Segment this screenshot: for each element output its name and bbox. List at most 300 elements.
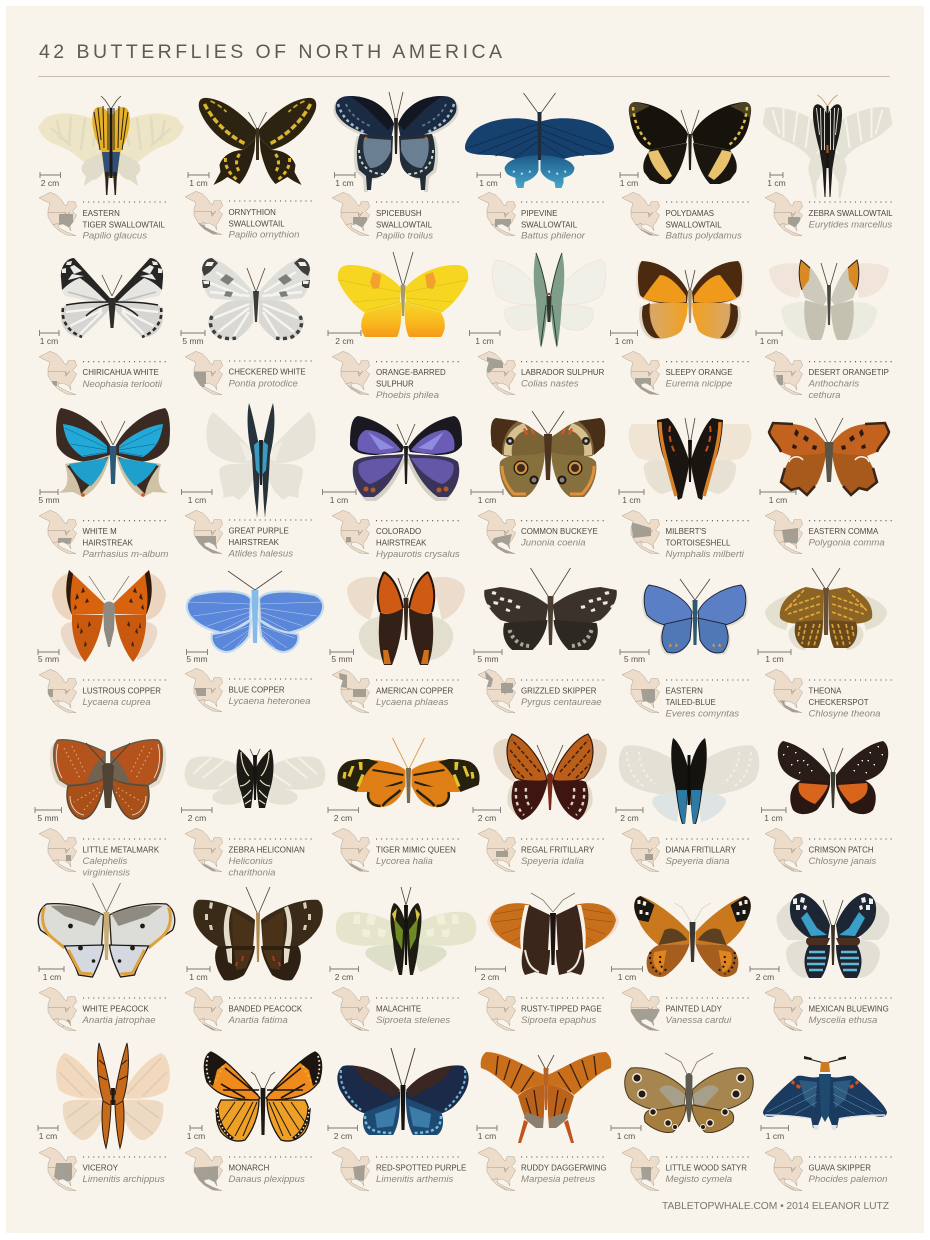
range map — [332, 828, 370, 874]
species label: POLYDAMAS — [666, 209, 714, 218]
species label — [521, 202, 604, 242]
scale bar: 1 cm — [622, 495, 641, 505]
butterfly: Great Purple Hairstreak — [206, 403, 316, 518]
species label: TAILED-BLUE — [666, 698, 716, 707]
species label: Junonia coenia — [520, 538, 586, 548]
butterfly: Lustrous Copper — [52, 570, 166, 662]
species label: ORANGE-BARRED — [376, 368, 446, 377]
species label — [82, 521, 168, 560]
species label: CHECKERED WHITE — [228, 368, 306, 376]
species label: LITTLE METALMARK — [82, 846, 160, 854]
range map — [185, 191, 223, 237]
specimen: Eastern Tiger Swallowtail — [38, 96, 184, 242]
range map — [765, 669, 803, 715]
species label: Papilio troilus — [376, 230, 433, 242]
scale bar: 1 cm — [618, 972, 636, 982]
species label: HAIRSTREAK — [376, 538, 427, 548]
scale bar: 5 mm — [38, 495, 60, 505]
range map — [765, 351, 803, 395]
species label: Colias nastes — [521, 378, 579, 390]
species label: Limenitis arthemis — [376, 1174, 454, 1185]
species label: Megisto cymela — [666, 1174, 732, 1185]
scale bar — [40, 172, 60, 188]
species label: Nymphalis milberti — [666, 549, 745, 560]
species label: SWALLOWTAIL — [228, 219, 285, 228]
species label — [228, 520, 312, 560]
butterfly: Tiger Mimic Queen — [337, 738, 480, 807]
butterfly: Ornythion Swallowtail — [199, 98, 316, 185]
species label: COMMON BUCKEYE — [521, 527, 598, 536]
specimen: Desert Orangetip — [756, 260, 892, 401]
butterfly: Desert Orangetip — [769, 260, 889, 340]
species label: WHITE PEACOCK — [82, 1004, 149, 1014]
range map — [478, 510, 516, 556]
species label — [666, 521, 749, 560]
species label: TIGER SWALLOWTAIL — [82, 220, 166, 229]
scale bar: 1 cm — [617, 1131, 635, 1141]
range map — [478, 987, 516, 1033]
species label: virginiensis — [82, 868, 130, 878]
specimen: Eastern Comma — [760, 418, 892, 554]
butterfly: Theona Checkerspot — [765, 568, 887, 650]
range map — [332, 192, 370, 236]
species label: Lycorea halia — [376, 856, 433, 867]
scale bar: 1 cm — [335, 178, 354, 188]
species label: VICEROY — [82, 1164, 119, 1172]
species label: Everes comyntas — [666, 708, 739, 720]
species label: RUSTY-TIPPED PAGE — [521, 1004, 602, 1014]
species label — [228, 679, 312, 707]
butterfly: American Copper — [347, 572, 465, 665]
species label: MILBERT'S — [666, 527, 706, 536]
range map — [478, 1147, 516, 1193]
species label: Eurema nicippe — [666, 378, 732, 390]
species label: REGAL FRITILLARY — [521, 846, 595, 854]
scale bar: 1 cm — [187, 1131, 205, 1141]
butterfly: Orange-barred Sulphur — [338, 252, 468, 337]
scale bar — [619, 489, 644, 505]
species label — [228, 998, 312, 1026]
specimen: Blue Copper — [185, 571, 323, 712]
specimen: White Peacock — [38, 883, 175, 1031]
species label: Pyrgus centaureae — [521, 697, 602, 708]
scale bar — [330, 649, 354, 664]
specimen: Guava Skipper — [761, 1056, 892, 1193]
species label: LUSTROUS COPPER — [82, 686, 161, 696]
range map — [622, 828, 660, 872]
species label — [228, 1157, 312, 1185]
species label: Anartia jatrophae — [82, 1015, 156, 1026]
scale bar — [187, 1125, 205, 1141]
butterfly: Malachite — [336, 887, 476, 975]
range map — [39, 351, 77, 395]
species label — [521, 998, 604, 1026]
species label: EASTERN COMMA — [808, 527, 879, 536]
range map — [765, 510, 803, 554]
species label: Siproeta stelenes — [376, 1015, 450, 1026]
range map — [765, 987, 803, 1033]
scale bar: 1 cm — [39, 1131, 57, 1141]
species label: charithonia — [228, 868, 275, 878]
scale bar — [182, 807, 212, 823]
species label — [521, 839, 604, 867]
range map — [39, 1147, 77, 1191]
specimen: Pipevine Swallowtail — [465, 93, 614, 242]
species label: Papilio glaucus — [82, 230, 147, 242]
specimen: Labrador Sulphur — [470, 253, 606, 395]
butterfly: Little Wood Satyr — [625, 1053, 753, 1133]
scale bar: 1 cm — [188, 495, 206, 505]
species label: Neophasia terlootii — [82, 379, 163, 390]
range map — [185, 828, 223, 874]
species label: Eurytides marcellus — [808, 219, 892, 230]
scale bar: 5 mm — [37, 813, 59, 823]
range map — [478, 351, 516, 395]
butterfly: Monarch — [204, 1052, 322, 1141]
species label: THEONA — [808, 686, 842, 696]
range map — [185, 351, 223, 395]
species label: CHECKERSPOT — [808, 698, 869, 707]
range map — [185, 510, 223, 556]
specimen: Common Buckeye — [471, 411, 605, 556]
scale bar — [750, 966, 779, 982]
specimen: Theona Checkerspot — [758, 568, 892, 720]
species label — [376, 839, 459, 867]
species label: Speyeria diana — [666, 856, 730, 867]
range map — [765, 828, 803, 874]
range map — [332, 1147, 370, 1191]
species label: RED-SPOTTED PURPLE — [376, 1164, 466, 1172]
species label: ZEBRA HELICONIAN — [228, 846, 305, 854]
species label: MONARCH — [228, 1164, 270, 1172]
specimen: Little Metalmark — [35, 740, 166, 878]
butterfly: Red-spotted Purple — [337, 1048, 469, 1135]
species label: DIANA FRITILLARY — [666, 846, 737, 854]
specimen: Zebra Heliconian — [182, 749, 325, 878]
butterfly: Sleepy Orange — [636, 261, 744, 340]
species label — [808, 202, 893, 230]
specimen: Crimson Patch — [762, 741, 892, 874]
species label: BANDED PEACOCK — [228, 1004, 303, 1014]
species label: Papilio ornythion — [228, 230, 299, 240]
species label: SLEEPY ORANGE — [666, 368, 732, 377]
range map — [39, 987, 77, 1031]
butterfly: White Peacock — [38, 883, 175, 977]
scale bar: 1 cm — [769, 495, 787, 505]
species label — [808, 839, 892, 867]
species label: COLORADO — [376, 527, 421, 536]
scale bar: 2 cm — [478, 813, 496, 823]
scale bar — [477, 1125, 497, 1141]
butterfly: Crimson Patch — [778, 741, 888, 814]
species label — [666, 680, 749, 720]
scale bar: 1 cm — [189, 178, 208, 188]
scale bar: 5 mm — [186, 654, 208, 664]
species label — [228, 839, 312, 878]
species label — [82, 202, 166, 242]
specimen: Mexican Bluewing — [750, 893, 892, 1033]
scale bar: 2 cm — [334, 1131, 352, 1141]
scale bar — [328, 330, 361, 346]
species label: Marpesia petreus — [521, 1174, 595, 1185]
species label — [666, 1157, 749, 1185]
species label: GREAT PURPLE — [228, 526, 289, 536]
species label — [376, 202, 459, 242]
scale bar: 1 cm — [43, 972, 61, 982]
species label: Phoebis philea — [376, 390, 439, 401]
species label: Calephelis — [82, 856, 128, 867]
specimen: Rusty-tipped Page — [476, 893, 619, 1033]
scale bar: 1 cm — [767, 178, 786, 188]
species label — [521, 680, 604, 708]
butterfly: Banded Peacock — [193, 887, 323, 981]
scale bar: 1 cm — [478, 495, 496, 505]
scale bar: 5 mm — [38, 654, 59, 664]
species label: LABRADOR SULPHUR — [521, 368, 605, 377]
butterfly: Guava Skipper — [763, 1056, 887, 1130]
specimen: Malachite — [330, 887, 476, 1033]
range map — [622, 351, 660, 397]
butterfly: Rusty-tipped Page — [487, 893, 619, 975]
range map — [765, 192, 803, 236]
species label: SULPHUR — [376, 380, 414, 388]
scale bar — [38, 649, 59, 664]
scale bar — [474, 649, 502, 664]
species label: Anartia fatima — [228, 1015, 288, 1026]
species label: Phocides palemon — [808, 1174, 887, 1185]
species label: ZEBRA SWALLOWTAIL — [808, 209, 893, 218]
range map — [478, 192, 516, 236]
specimen: Great Purple Hairstreak — [182, 403, 316, 560]
species label: Limenitis archippus — [82, 1174, 165, 1185]
species label — [82, 998, 166, 1026]
species label: Battus polydamus — [666, 230, 742, 242]
species label — [82, 839, 166, 878]
species label: SWALLOWTAIL — [376, 220, 433, 229]
species label: Siproeta epaphus — [521, 1015, 596, 1026]
scale bar — [756, 330, 782, 346]
scale bar — [616, 807, 643, 823]
species label — [376, 680, 459, 708]
scale bar — [470, 330, 500, 346]
species label: Lycaena heteronea — [228, 696, 310, 707]
specimen: White M Hairstreak — [38, 408, 170, 560]
scale bar — [471, 489, 503, 505]
scale bar: 5 mm — [477, 654, 499, 664]
species label: CRIMSON PATCH — [808, 846, 874, 854]
species label — [82, 1157, 166, 1185]
species label: Vanessa cardui — [666, 1015, 732, 1026]
species label: Lycaena cuprea — [82, 697, 151, 708]
butterfly: Regal Fritillary — [493, 734, 607, 820]
range map — [185, 668, 223, 712]
butterfly: Mexican Bluewing — [777, 893, 889, 978]
scale bar: 2 cm — [756, 972, 774, 982]
species label — [808, 521, 892, 548]
species label: SWALLOWTAIL — [666, 220, 722, 229]
species label: cethura — [808, 390, 840, 401]
species label: Speyeria idalia — [521, 856, 584, 867]
scale bar — [187, 966, 210, 982]
species label: HAIRSTREAK — [228, 538, 280, 547]
range map — [332, 351, 370, 397]
range map — [621, 987, 660, 1033]
scale bar: 2 cm — [334, 813, 352, 823]
species label: Hypaurotis crysalus — [376, 549, 460, 560]
specimen: Chiricahua White — [39, 258, 166, 395]
specimen: Ornythion Swallowtail — [185, 98, 316, 241]
species label: Polygonia comma — [808, 538, 885, 548]
specimen: Ruddy Daggerwing — [477, 1052, 611, 1193]
species label — [808, 1157, 892, 1185]
scale bar: 1 cm — [479, 178, 498, 188]
butterfly: Ruddy Daggerwing — [481, 1052, 611, 1143]
species label: WHITE M — [82, 527, 117, 536]
butterfly: Common Buckeye — [491, 411, 605, 497]
specimen: Tiger Mimic Queen — [328, 738, 480, 874]
species label — [521, 1157, 607, 1185]
scale bar: 1 cm — [764, 813, 783, 823]
range map — [39, 192, 77, 236]
scale bar — [38, 1125, 58, 1141]
specimen: Regal Fritillary — [473, 734, 607, 872]
butterfly: White M Hairstreak — [56, 408, 170, 497]
title: 42 BUTTERFLIES OF NORTH AMERICA — [39, 41, 502, 63]
specimen: Orange-barred Sulphur — [328, 252, 468, 401]
butterfly: Eastern Tailed-Blue — [642, 579, 748, 655]
species label — [376, 998, 459, 1026]
specimen: Monarch — [185, 1052, 322, 1193]
butterfly: Viceroy — [56, 1043, 170, 1149]
species label: EASTERN — [82, 209, 120, 218]
species label: TIGER MIMIC QUEEN — [376, 846, 456, 854]
species label: TORTOISESHELL — [666, 538, 731, 548]
scale bar — [328, 1125, 358, 1141]
species label: MALACHITE — [376, 1004, 421, 1014]
butterfly: Chiricahua White — [61, 258, 163, 337]
butterfly: Zebra Swallowtail — [762, 95, 892, 198]
range map — [332, 669, 370, 713]
species label: PAINTED LADY — [666, 1004, 723, 1014]
scale bar: 2 cm — [41, 178, 59, 188]
scale bar — [476, 966, 506, 982]
specimen: Checkered White — [181, 258, 312, 395]
species label — [666, 202, 749, 242]
species label: Pontia protodice — [228, 378, 298, 390]
species label: Chlosyne janais — [808, 856, 876, 867]
species label — [520, 521, 604, 548]
species label — [808, 362, 892, 401]
scale bar — [611, 1125, 641, 1141]
butterfly: Eastern Tiger Swallowtail — [38, 96, 184, 195]
range map — [185, 1147, 223, 1193]
scale bar — [758, 649, 791, 664]
scale bar: 1 cm — [189, 972, 208, 982]
species label — [376, 362, 459, 401]
butterfly: Labrador Sulphur — [492, 253, 606, 348]
species label: Lycaena phlaeas — [376, 697, 449, 708]
species label: DESERT ORANGETIP — [808, 368, 889, 377]
scale bar — [620, 649, 649, 664]
species label: Parrhasius m-album — [82, 549, 168, 560]
range map — [39, 828, 77, 872]
scale bar — [38, 489, 60, 505]
scale bar — [188, 172, 209, 188]
specimen: Colorado Hairstreak — [322, 416, 462, 560]
species label — [376, 521, 460, 560]
species label — [666, 998, 749, 1026]
scale bar — [328, 807, 358, 823]
specimen: Red-spotted Purple — [328, 1048, 469, 1191]
range map — [478, 828, 516, 872]
butterfly: Grizzled Skipper — [484, 568, 617, 650]
specimen: Grizzled Skipper — [474, 568, 617, 713]
specimen: Little Wood Satyr — [611, 1053, 753, 1191]
butterfly: Milbert's Tortoiseshell — [629, 418, 751, 500]
scale bar: 1 cm — [330, 495, 348, 505]
range map — [332, 510, 370, 554]
scale bar: 2 cm — [335, 336, 354, 346]
range map — [39, 510, 77, 554]
species label: SWALLOWTAIL — [521, 220, 578, 229]
range map — [332, 987, 370, 1033]
scale bar: 1 cm — [475, 336, 494, 346]
species label — [808, 680, 892, 720]
butterfly: Diana Fritillary — [619, 738, 759, 824]
specimen: Diana Fritillary — [616, 738, 759, 872]
species label — [808, 998, 892, 1026]
species label: BLUE COPPER — [228, 686, 285, 694]
species label: MEXICAN BLUEWING — [808, 1004, 889, 1014]
scale bar: 1 cm — [615, 336, 633, 346]
species label: EASTERN — [666, 686, 703, 696]
species label: CHIRICAHUA WHITE — [82, 368, 159, 377]
scale bar: 5 mm — [331, 654, 353, 664]
range map — [39, 669, 77, 713]
specimen: Banded Peacock — [185, 887, 323, 1033]
scale bar — [334, 172, 355, 188]
species label: SPICEBUSH — [376, 209, 422, 218]
scale bar — [182, 489, 212, 505]
species label: RUDDY DAGGERWING — [521, 1164, 607, 1172]
species label: HAIRSTREAK — [82, 538, 134, 548]
species label: GUAVA SKIPPER — [808, 1164, 871, 1172]
specimen: Eastern Tailed-Blue — [620, 579, 749, 720]
species label: Anthocharis — [808, 378, 859, 390]
range map — [622, 192, 661, 238]
species label: AMERICAN COPPER — [376, 686, 453, 696]
footer credit: TABLETOPWHALE.COM • 2014 ELEANOR LUTZ — [662, 1201, 889, 1212]
species label — [82, 362, 166, 390]
species label — [521, 362, 605, 390]
range map — [622, 669, 660, 713]
species label: Chlosyne theona — [808, 708, 881, 720]
scale bar — [330, 966, 358, 982]
specimen: Viceroy — [38, 1043, 170, 1191]
scale bar — [767, 172, 786, 188]
scale bar: 1 cm — [620, 178, 638, 188]
butterfly: Eastern Comma — [769, 418, 889, 495]
specimen: Painted Lady — [612, 896, 751, 1033]
scale bar — [186, 649, 208, 664]
specimen: Sleepy Orange — [610, 261, 749, 397]
species label — [228, 361, 312, 390]
range map — [185, 987, 223, 1033]
species label: PIPEVINE — [521, 209, 557, 218]
species label: Heliconius — [228, 856, 273, 867]
butterfly: Colorado Hairstreak — [350, 416, 462, 501]
species label: Myscelia ethusa — [808, 1015, 877, 1026]
